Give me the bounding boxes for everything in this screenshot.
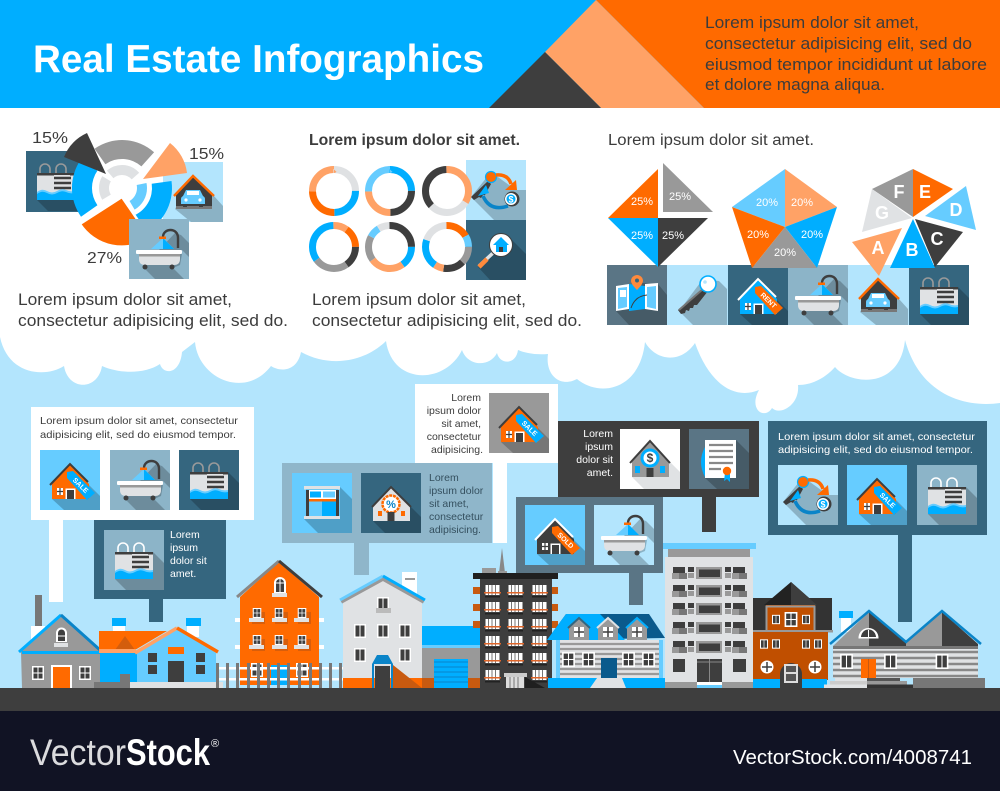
chart: pentagon 20%: 20% [756,197,778,209]
icon: key [667,265,728,325]
text: amet. [170,568,196,580]
text [429,472,484,536]
text: sit amet, [429,498,469,510]
chart: diamond 25%: 25% [631,196,653,208]
text: adipisicing. [431,444,483,456]
billboard: right blue [768,421,987,622]
text [576,428,613,479]
text: consectetur [429,511,484,523]
donut 5 [368,226,412,268]
icon: pool [909,265,969,325]
header banner [0,0,1000,108]
icon: bath [594,505,654,565]
icon: sale house: SALE [520,420,538,438]
icon: key exchange [778,465,838,525]
header paragraph [705,14,987,94]
footer bar [0,711,1000,791]
chart: diamond 25%: 25% [662,230,684,242]
building: grey cottage [19,595,100,688]
icon: sale house [489,393,549,453]
stock id: VectorStock.com/4008741 [733,747,972,769]
icon: sale house: SALE [71,477,89,495]
labels: 27% [87,250,122,267]
logo: Vector [30,732,126,773]
title: Real Estate Infographics [33,38,484,81]
text: ipsum [170,542,198,554]
chart: pentagon 20%: 20% [791,197,813,209]
text: ipsum dolor [427,405,481,417]
chart: pentagon 20%: 20% [747,229,769,241]
text: consectetur [427,431,482,443]
icon: pool [179,450,239,510]
header paragraph: Lorem ipsum dolor sit amet, [705,14,919,32]
chart: heptagon letters: B [906,240,918,260]
chart: pentagon 20%: 20% [774,247,796,259]
text: Lorem ipsum dolor sit amet, consectetur [778,431,976,443]
icon: garage tile [163,162,223,222]
icon: sale house: SALE [878,492,896,510]
icon: pool [104,530,164,590]
chart: pentagon 20%: 20% [801,229,823,241]
chart: diamond 25% [608,163,713,267]
building: brick house [753,582,833,688]
header paragraph: eiusmod tempor incididunt ut labore [705,56,987,74]
logo [30,732,219,773]
icon: certificate [689,429,749,489]
building: grey long house [824,611,985,688]
building: blue house [94,618,223,688]
chart: pentagon 20% [732,169,837,268]
donut 3 [426,170,468,212]
icon: sale house [40,450,100,510]
chart: heptagon letters: F [894,182,904,202]
icon: pool tile [26,151,86,212]
icon: rent house [728,265,788,325]
icon: key exchange tile: $ [508,194,514,204]
billboard: dark [558,421,759,532]
icon row [607,265,969,325]
donut 2 [368,170,412,212]
icon: sold house [525,505,585,565]
icon: percent house [361,473,421,533]
text: adipisicing elit, sed do eiusmod tempor. [40,429,236,441]
chart: heptagon letters [852,169,976,276]
text: ipsum [585,441,613,453]
heading: Lorem ipsum dolor sit amet. [608,132,814,149]
icon: key exchange tile [466,160,526,220]
text: dolor sit [170,555,207,567]
panel: polygon charts [607,132,976,325]
billboard: slate [516,497,663,605]
icon: dollar house [620,429,680,489]
panel: segmented pie chart [18,130,288,330]
chart: heptagon letters: D [950,200,962,220]
icon: pool [917,465,977,525]
text: ipsum dolor [429,485,484,497]
icon: key exchange: $ [820,500,826,510]
labels: 15% [32,130,68,147]
billboard: grey-blue [282,463,492,575]
text: dolor sit [576,454,613,466]
text: Lorem [583,428,613,440]
icon: garage [848,265,909,325]
caption [312,291,582,330]
caption: Lorem ipsum dolor sit amet, [18,291,232,309]
building: white house with garage [340,572,482,688]
donut 4 [312,226,356,268]
building: white high-rise [663,543,756,688]
icon: search house tile [466,220,526,280]
fence [216,663,343,688]
chart: diamond 25%: 25% [669,191,691,203]
chart: heptagon letters: C [930,229,944,249]
icon: bath tile [129,219,189,279]
text: Lorem [170,529,200,541]
labels [32,130,224,267]
chart: heptagon letters: A [872,238,884,258]
icon: sale house [847,465,907,525]
building: dark tower [473,548,558,688]
billboard: dark blue left [94,520,226,622]
billboard: white centre [415,384,558,543]
text [40,415,239,441]
caption [18,291,288,330]
pie segments [64,133,187,247]
building: orange house with fence [216,561,343,688]
text: Lorem ipsum dolor sit amet, consectetur [40,415,239,427]
caption: consectetur adipisicing elit, sed do. [18,312,288,330]
header paragraph: consectetur adipisicing elit, sed do [705,35,972,53]
caption: Lorem ipsum dolor sit amet, [312,291,526,309]
text [427,392,483,456]
icon: sold house: SOLD [556,532,574,550]
text: Lorem [451,392,481,404]
text: Lorem [429,472,459,484]
billboard: white left [31,407,254,602]
chart: heptagon letters: G [875,203,889,223]
caption: consectetur adipisicing elit, sed do. [312,312,582,330]
logo: Stock [126,732,210,773]
text [778,431,976,456]
building: blue manor [547,614,665,688]
panel: donut charts [309,132,582,330]
donut 1 [312,170,356,212]
chart: heptagon letters: E [919,182,931,202]
heading: Lorem ipsum dolor sit amet. [309,132,520,149]
labels: 15% [189,146,224,163]
text: adipisicing. [429,524,481,536]
cloud top area [0,100,1000,413]
icon: bath [110,450,170,510]
text: amet. [587,467,613,479]
header paragraph: et dolore magna aliqua. [705,76,885,94]
icon: map [607,265,667,325]
icon: percent house: % [386,499,396,511]
donut 6 [426,226,468,268]
icon: bath [788,265,848,325]
icon: window [292,473,352,533]
garage [422,626,482,645]
text [170,529,207,580]
ground [0,688,1000,711]
text: adipisicing elit, sed do eiusmod tempor. [778,444,973,456]
logo: ® [211,738,219,750]
icon: rent house: RENT [759,292,778,311]
icon: dollar house: $ [647,451,654,465]
text: sit amet, [441,418,481,430]
chart: diamond 25%: 25% [631,230,653,242]
